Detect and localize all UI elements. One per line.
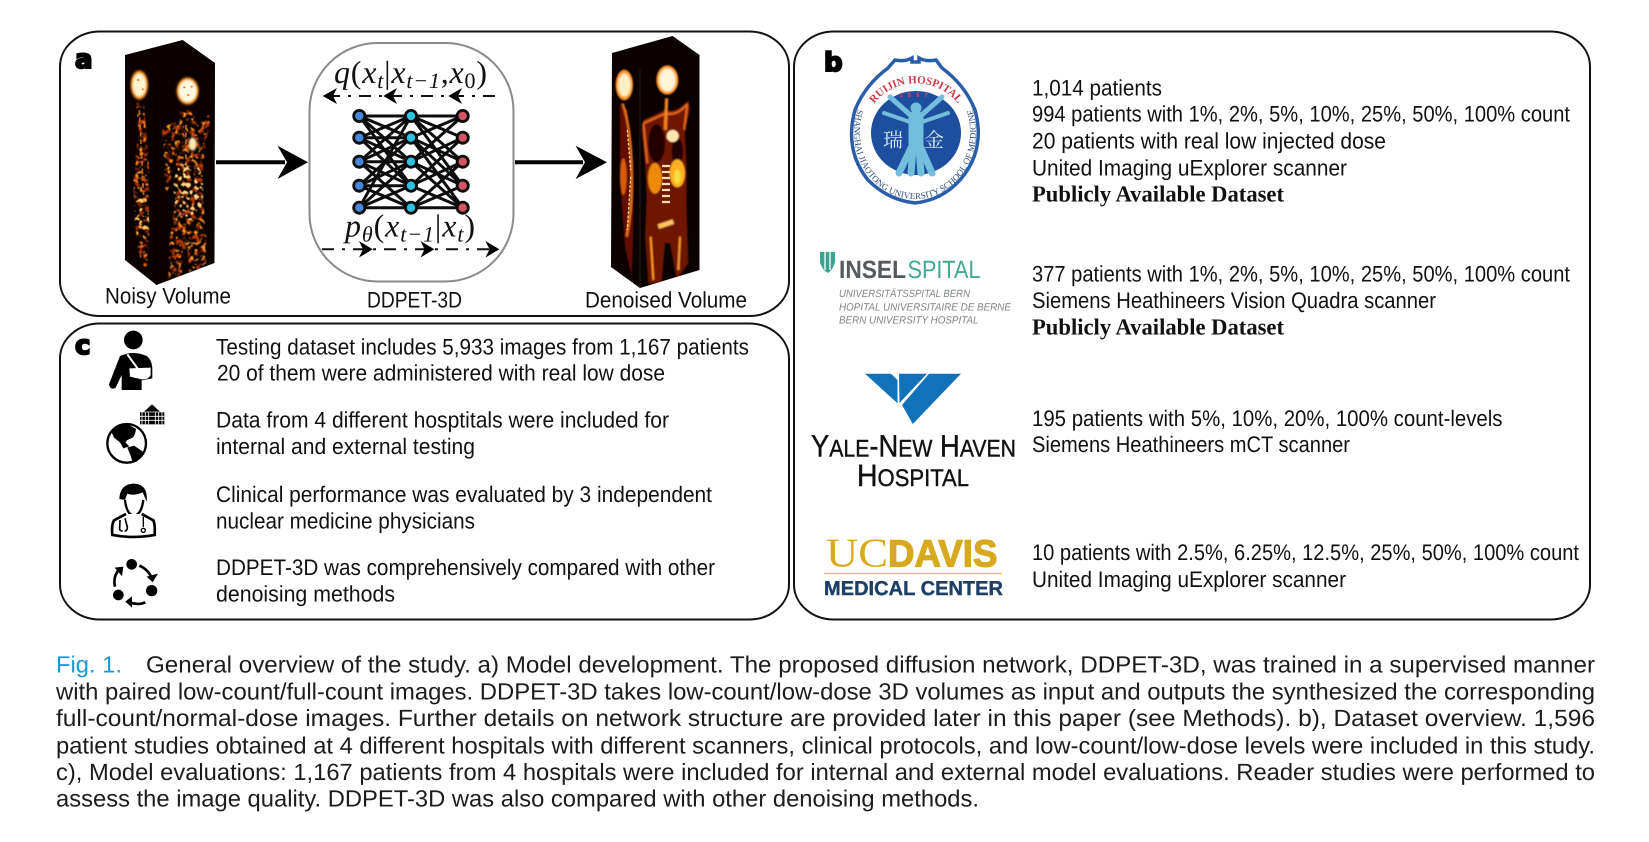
text: Yale dataset: Siemens Heathineers mCT scanner <box>1032 432 1350 457</box>
denoised PET volume <box>611 36 700 288</box>
reverse process formula: θ <box>362 222 373 247</box>
forward process formula: x <box>391 54 406 90</box>
logo: Inselspital: HOPITAL UNIVERSITAIRE DE BERNE <box>839 302 1012 314</box>
forward process formula: x <box>450 54 464 90</box>
reverse process formula: t <box>457 222 464 247</box>
caption body text: full-count/normal-dose images. Further details on network structure are provided later in this paper (see Methods). b), Dataset overview. 1,596 <box>56 705 1595 731</box>
forward process formula: t−1 <box>406 68 440 93</box>
noisy PET volume <box>125 40 215 285</box>
panel c: model evaluation <box>60 324 789 620</box>
text: Ruijin dataset <box>1032 75 1571 207</box>
logo: Inselspital <box>820 252 1012 327</box>
panel a: model development <box>60 32 789 316</box>
forward process formula: 0 <box>465 68 476 93</box>
logo: Ruijin Hospital <box>850 55 980 205</box>
reverse process formula: t−1 <box>400 222 434 247</box>
text: Inselspital dataset: Publicly Available Dataset <box>1032 314 1284 339</box>
text: UC Davis dataset <box>1032 540 1580 592</box>
text: clinical performance: nuclear medicine physicians <box>216 509 475 534</box>
forward process formula: , <box>441 54 449 90</box>
text: Ruijin dataset: Publicly Available Dataset <box>1032 182 1284 207</box>
logo: Inselspital: UNIVERSITÄTSSPITAL BERN <box>839 288 970 300</box>
text: Inselspital dataset <box>1032 262 1571 339</box>
panel letter a: a <box>75 45 93 75</box>
reverse dashed arrow <box>322 241 499 258</box>
caption label: Fig. 1.: Fig. 1. <box>56 651 122 677</box>
reverse process formula: x <box>385 208 399 244</box>
forward dashed arrow <box>323 88 500 104</box>
logo: UC Davis Medical Center <box>824 530 1004 600</box>
caption body text: assess the image quality. DDPET-3D was also compared with other denoising methods. <box>56 786 979 812</box>
logo: Yale-New Haven Hospital: YALE-NEW HAVEN <box>811 429 1016 464</box>
text: hospitals <box>216 408 669 459</box>
figure caption <box>55 651 1595 812</box>
label: noisy volume: Noisy Volume <box>105 283 231 308</box>
logo: Ruijin Hospital: SHANGHAI JIAOTONG UNIVERSITY SCHOOL OF MEDICINE <box>854 110 976 200</box>
text: Inselspital dataset: Siemens Heathineers Vision Quadra scanner <box>1032 288 1436 313</box>
text: UC Davis dataset: United Imaging uExplorer scanner <box>1032 567 1346 592</box>
arrow: network to denoised volume <box>515 146 607 179</box>
text: Yale dataset <box>1032 406 1502 457</box>
text: Ruijin dataset: United Imaging uExplorer scanner <box>1032 156 1347 181</box>
logo: Ruijin Hospital: 瑞 <box>883 130 903 152</box>
DDPET-3D network box <box>310 43 514 282</box>
caption body text: with paired low-count/full-count images. DDPET-3D takes low-count/low-dose 3D volumes as input and outputs the synthesized the corresponding <box>55 678 1595 704</box>
text: method comparison <box>216 555 715 607</box>
forward process formula: | <box>384 54 391 90</box>
logo: Inselspital: INSEL <box>839 256 906 284</box>
text: hospitals: internal and external testing <box>216 434 475 459</box>
logo: Yale-New Haven Hospital: HOSPITAL <box>857 458 969 493</box>
label: denoised volume: Denoised Volume <box>585 288 747 313</box>
reverse process formula: p <box>345 208 361 244</box>
icon: globe with hospital building <box>107 404 164 463</box>
forward process formula: q(x <box>334 54 376 90</box>
logo: Ruijin Hospital: RUIJIN HOSPITAL <box>868 76 962 104</box>
logo: Inselspital: BERN UNIVERSITY HOSPITAL <box>839 315 979 327</box>
caption body text: c), Model evaluations: 1,167 patients from 4 hospitals were included for internal and external model evaluations. Reader studies were performed to <box>56 759 1595 785</box>
text: clinical performance: Clinical performance was evaluated by 3 independent <box>216 482 713 507</box>
icon: comparison cycle <box>113 559 158 608</box>
text: testing dataset: 20 of them were administered with real low dose <box>217 361 665 386</box>
text: testing dataset <box>216 334 749 386</box>
panel b: dataset overview <box>793 30 1591 620</box>
icon: physician with stethoscope <box>112 484 155 537</box>
panel letter c: c <box>75 331 90 361</box>
caption body text: patient studies obtained at 4 different hospitals with different scanners, clinical protocols, and low-count/low-dose levels were included in this study. <box>56 732 1595 758</box>
text: Ruijin dataset: 20 patients with real low injected dose <box>1032 129 1386 154</box>
text: hospitals: Data from 4 different hosptitals were included for <box>216 408 669 433</box>
logo: Yale-New Haven Hospital <box>811 374 1016 493</box>
text: method comparison: denoising methods <box>216 582 395 607</box>
logo: UC Davis Medical Center: UC <box>826 530 888 576</box>
text: Yale dataset: 195 patients with 5%, 10%, 20%, 100% count-levels <box>1032 406 1502 431</box>
panel letter b: b <box>824 48 843 78</box>
neural network diagram <box>354 110 468 213</box>
reverse process formula: ( <box>374 208 384 244</box>
caption body text <box>55 651 1595 812</box>
text: Ruijin dataset: 994 patients with 1%, 2%, 5%, 10%, 25%, 50%, 100% count <box>1032 102 1571 127</box>
forward process formula: t <box>377 68 384 93</box>
label: DDPET-3D: DDPET-3D <box>367 288 462 313</box>
logo: Inselspital: SPITAL <box>908 256 981 284</box>
text: Inselspital dataset: 377 patients with 1%, 2%, 5%, 10%, 25%, 50%, 100% count <box>1032 262 1571 287</box>
caption body text: General overview of the study. a) Model development. The proposed diffusion network, DDPET-3D, was trained in a supervised manner <box>146 651 1595 677</box>
text: testing dataset: Testing dataset includes 5,933 images from 1,167 patients <box>216 334 749 359</box>
icon: patient with arm sling <box>109 331 152 390</box>
text: UC Davis dataset: 10 patients with 2.5%, 6.25%, 12.5%, 25%, 50%, 100% count <box>1032 540 1580 565</box>
logo: UC Davis Medical Center: DAVIS <box>888 534 998 576</box>
reverse process formula: ) <box>464 208 475 244</box>
forward process formula: ) <box>476 54 487 90</box>
logo: UC Davis Medical Center: MEDICAL CENTER <box>824 578 1004 600</box>
reverse process formula: | <box>435 208 441 244</box>
text: method comparison: DDPET-3D was comprehensively compared with other <box>216 555 715 580</box>
arrow: noisy volume to network <box>216 146 308 179</box>
logo: Ruijin Hospital: 1887 <box>899 92 933 99</box>
logo: Ruijin Hospital: 金 <box>924 130 944 152</box>
text: Ruijin dataset: 1,014 patients <box>1032 75 1162 100</box>
text: clinical performance <box>216 482 713 534</box>
reverse process formula: x <box>442 208 456 244</box>
